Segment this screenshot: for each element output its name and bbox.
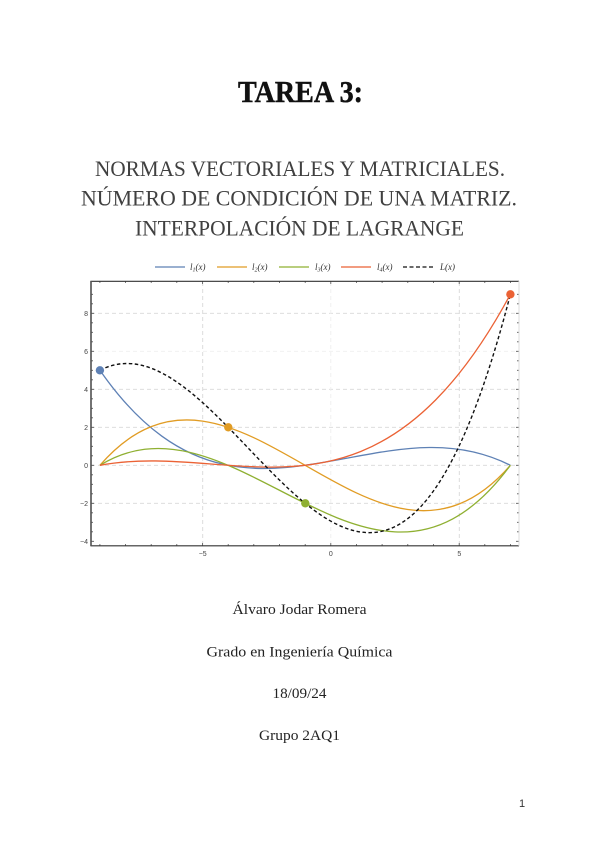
title: TAREA 3: [238, 74, 363, 109]
subtitle: INTERPOLACIÓN DE LAGRANGE [135, 216, 464, 240]
chart legend: l [377, 262, 380, 272]
chart legend [155, 262, 455, 274]
author block [206, 601, 393, 744]
y axis labels: 8 [84, 311, 88, 318]
y axis labels: 0 [84, 463, 88, 470]
y axis labels: 2 [84, 425, 88, 432]
chart legend: (x) [383, 262, 393, 272]
chart legend: 4 [380, 266, 383, 274]
y axis labels: −2 [80, 501, 88, 508]
author block: 18/09/24 [272, 686, 327, 702]
x axis labels: 5 [457, 551, 461, 558]
author block: Grupo 2AQ1 [259, 728, 340, 744]
author block: Grado en Ingeniería Química [206, 644, 393, 660]
chart legend: 2 [255, 268, 258, 274]
chart: Lagrange interpolation [80, 262, 519, 558]
curve: L dashed interpolant [100, 294, 510, 533]
chart legend: (x) [321, 262, 331, 272]
x axis labels: 0 [329, 551, 333, 558]
chart legend: l [315, 262, 318, 272]
curve: l4 [100, 294, 510, 467]
author block: Álvaro Jodar Romera [232, 601, 367, 618]
chart legend: (x) [196, 262, 206, 272]
y axis labels: −4 [80, 539, 88, 546]
curve: l3 [100, 448, 510, 532]
y axis labels [80, 311, 88, 546]
chart legend: 1 [193, 268, 196, 274]
chart legend: l [190, 262, 193, 272]
subtitle: NORMAS VECTORIALES Y MATRICIALES. [95, 156, 505, 181]
y axis labels: 6 [84, 349, 88, 356]
point: (7, 9) [506, 290, 515, 298]
subtitle [81, 156, 517, 240]
point: (-1, -2) [301, 499, 309, 507]
chart legend: l [252, 262, 255, 272]
y axis labels: 4 [84, 387, 88, 394]
chart legend: (x) [258, 262, 268, 272]
chart legend: 3 [317, 268, 321, 274]
x axis labels: −5 [199, 551, 207, 558]
curve: l2 [100, 420, 510, 511]
chart legend: L(x) [439, 262, 455, 272]
point: (-9, 5) [96, 366, 104, 374]
subtitle: NÚMERO DE CONDICIÓN DE UNA MATRIZ. [81, 186, 517, 210]
curve: l1 [100, 370, 510, 468]
x axis labels [199, 551, 461, 558]
page number: 1 [519, 798, 525, 810]
point: (-4, 2) [224, 423, 232, 431]
plot frame [91, 281, 519, 546]
